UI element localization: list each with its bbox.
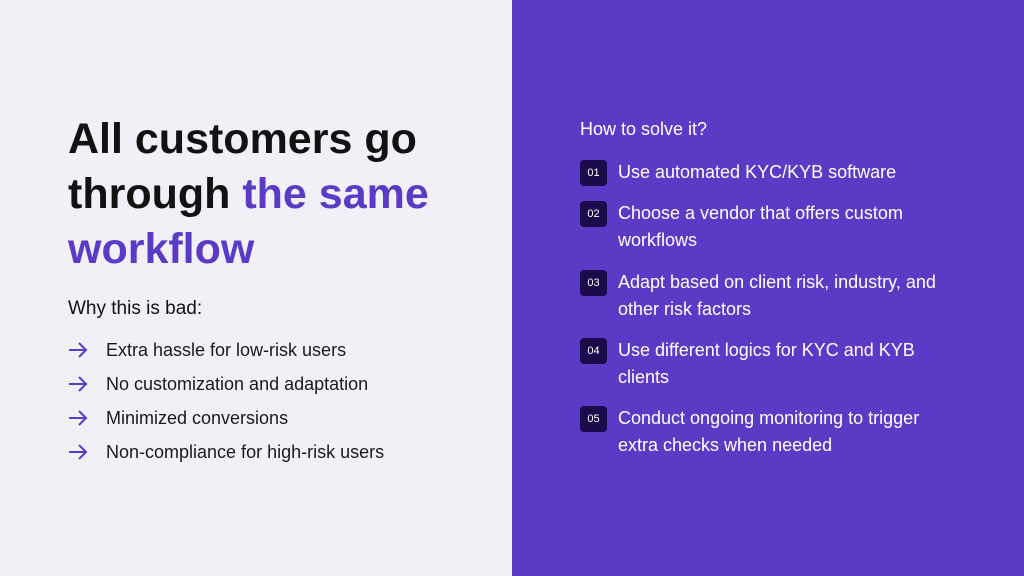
bullet 2: No customization and adaptation bbox=[106, 374, 368, 394]
item 01: Use automated KYC/KYB software bbox=[618, 162, 896, 182]
item 03: 03 bbox=[587, 277, 600, 289]
item 02: Choose a vendor that offers custom bbox=[618, 203, 903, 223]
item 05 bbox=[580, 406, 919, 455]
right panel bbox=[512, 0, 1024, 576]
left panel bbox=[0, 0, 512, 576]
title: All customers go bbox=[68, 115, 417, 163]
item 02: workflows bbox=[618, 230, 697, 250]
item 03 bbox=[580, 270, 936, 319]
item 05: Conduct ongoing monitoring to trigger bbox=[618, 408, 919, 428]
title bbox=[68, 115, 429, 273]
item 01: 01 bbox=[587, 167, 600, 179]
item 04: 04 bbox=[587, 345, 600, 357]
item 05: 05 bbox=[587, 413, 600, 425]
subheading: why bad: Why this is bad: bbox=[68, 298, 202, 319]
item 04: Use different logics for KYC and KYB bbox=[618, 340, 915, 360]
title: workflow bbox=[68, 225, 254, 273]
bullet 3: Minimized conversions bbox=[106, 408, 288, 428]
item 04: clients bbox=[618, 367, 669, 387]
subheading: how to solve: How to solve it? bbox=[580, 119, 707, 139]
item 01 bbox=[580, 160, 896, 186]
title: through the same bbox=[68, 170, 429, 218]
bullet 4: Non-compliance for high-risk users bbox=[106, 442, 384, 462]
item 05: extra checks when needed bbox=[618, 435, 832, 455]
item 03: Adapt based on client risk, industry, and bbox=[618, 272, 936, 292]
item 04 bbox=[580, 338, 915, 387]
item 02 bbox=[580, 201, 903, 250]
item 03: other risk factors bbox=[618, 299, 751, 319]
item 02: 02 bbox=[587, 208, 600, 220]
bullet 1: Extra hassle for low-risk users bbox=[106, 340, 346, 360]
